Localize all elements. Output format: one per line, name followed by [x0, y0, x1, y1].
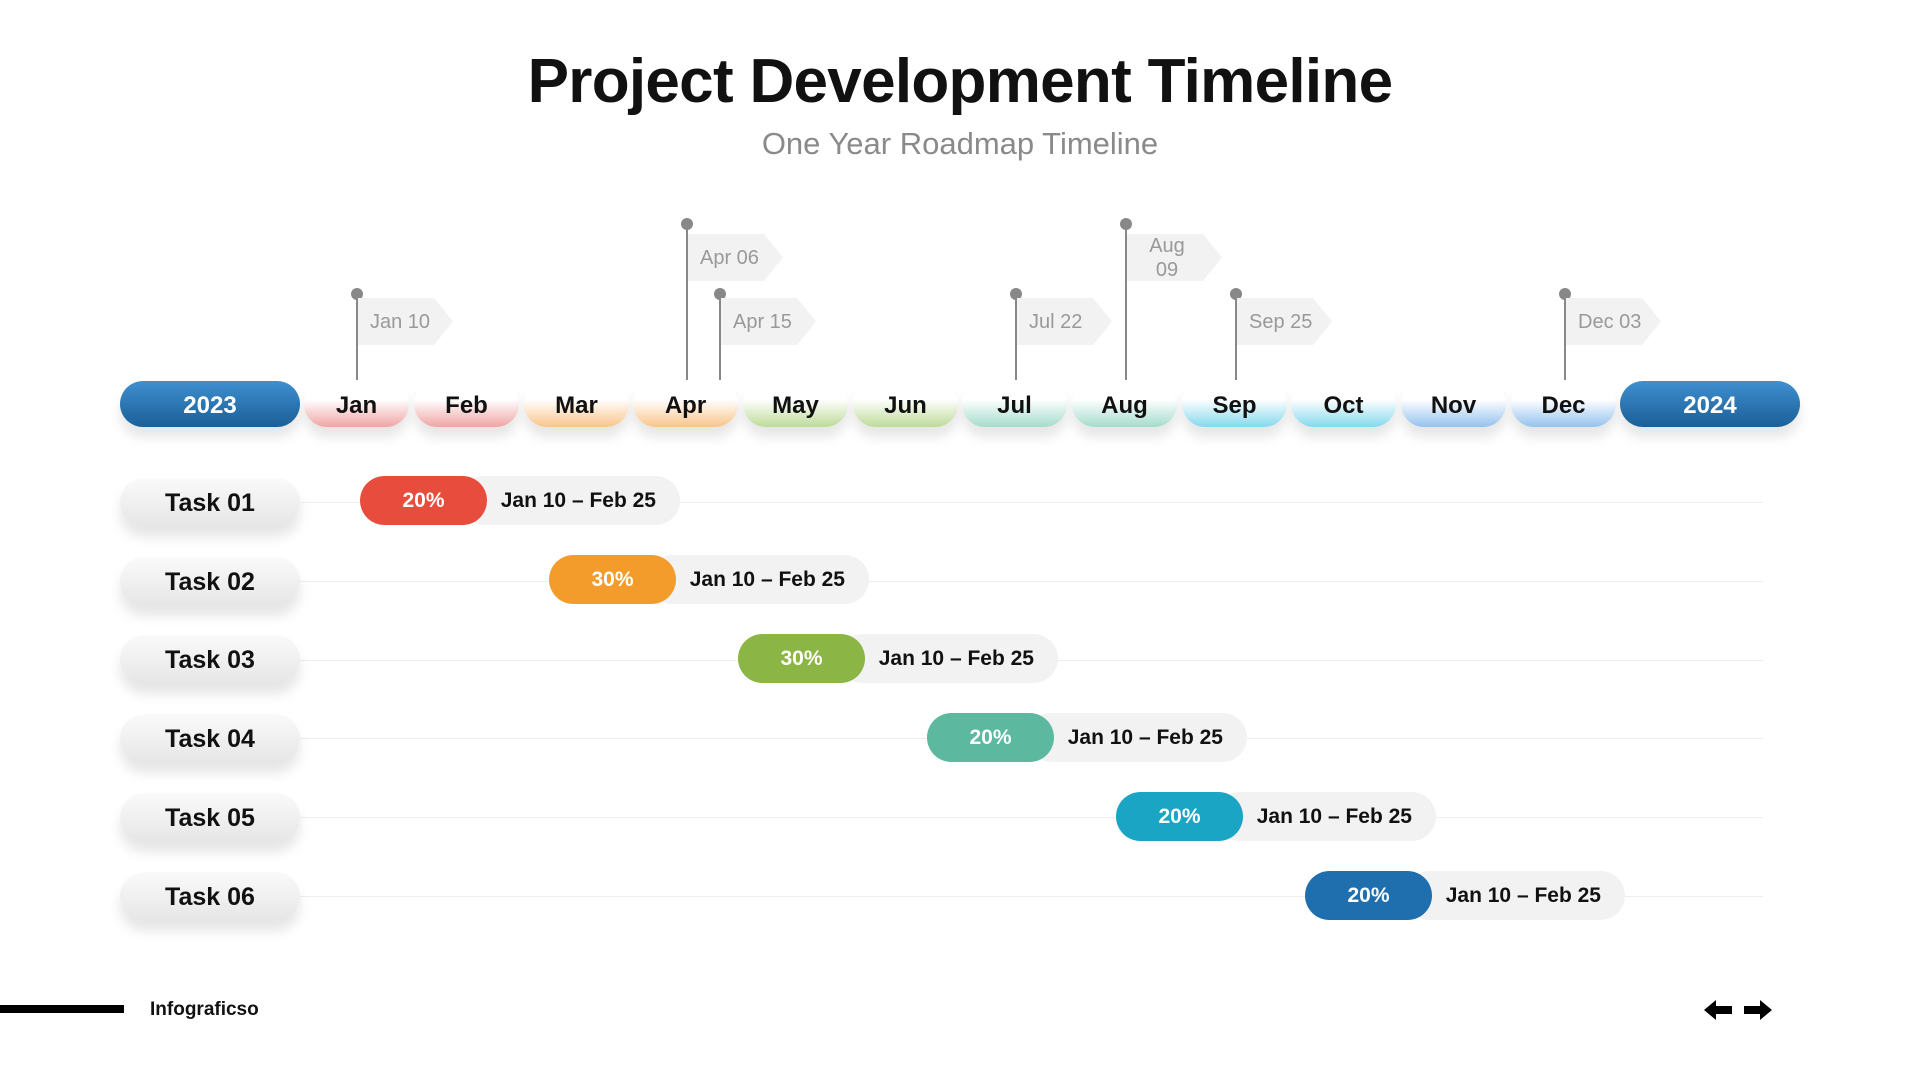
task labels: Task 01	[165, 489, 255, 517]
subtitle: One Year Roadmap Timeline	[762, 126, 1158, 161]
milestone pins: Aug	[1149, 235, 1185, 257]
task labels: Task 05	[165, 804, 255, 832]
timeline bar	[118, 381, 1802, 440]
milestone pins: 09	[1156, 259, 1178, 281]
milestone pins: Jul 22	[1029, 311, 1082, 333]
timeline bar: Nov	[1431, 392, 1476, 419]
task labels	[118, 486, 302, 934]
footer brand: Infograficso	[150, 999, 259, 1020]
task bar 01: Jan 10 – Feb 25	[501, 489, 656, 512]
timeline bar: Jun	[884, 392, 927, 419]
timeline bar: Apr	[665, 392, 706, 419]
year 2024	[1620, 381, 1800, 427]
milestone pins: Dec 03	[1578, 311, 1641, 333]
task bar 05: 20%	[1158, 805, 1201, 828]
task bar 02: Jan 10 – Feb 25	[690, 568, 845, 591]
task bar 03: 30%	[780, 647, 823, 670]
year 2023: 2023	[183, 392, 237, 419]
task bar 06	[1305, 871, 1625, 920]
pin: Aug 09	[1125, 224, 1127, 380]
milestone pins: Apr 15	[733, 311, 792, 333]
task bar 02: 30%	[591, 568, 634, 591]
task bar 04	[927, 713, 1247, 762]
months: Jan	[336, 392, 377, 419]
title: Project Development Timeline	[528, 47, 1392, 116]
timeline bar: Mar	[555, 392, 598, 419]
milestone pins: Apr 06	[700, 247, 759, 269]
months	[304, 381, 409, 427]
timeline bar: Sep	[1212, 392, 1256, 419]
timeline bar: Jul	[997, 392, 1032, 419]
task bar 03: Jan 10 – Feb 25	[879, 647, 1034, 670]
milestone pins	[351, 218, 1660, 380]
timeline bar: May	[772, 392, 819, 419]
timeline bar: Feb	[445, 392, 488, 419]
task labels: Task 03	[165, 646, 255, 674]
task bar 06: 20%	[1347, 884, 1390, 907]
milestone pins: Jan 10	[370, 311, 430, 333]
timeline bar: Dec	[1541, 392, 1586, 419]
task bar 04: 20%	[969, 726, 1012, 749]
pin: Dec 03	[1564, 294, 1566, 380]
task bar 02	[549, 555, 869, 604]
pin: Jan 10	[356, 294, 358, 380]
pin: Jul 22	[1015, 294, 1017, 380]
task bar 05	[1116, 792, 1436, 841]
task bar 03	[738, 634, 1058, 683]
task bar 06: Jan 10 – Feb 25	[1446, 884, 1601, 907]
task labels: Task 04	[165, 725, 255, 753]
footer bar	[0, 1005, 124, 1013]
icon: nav arrows	[1704, 1000, 1772, 1020]
pin: Apr 06	[686, 224, 688, 380]
task labels: Task 06	[165, 883, 255, 911]
year 2024: 2024	[1683, 392, 1737, 419]
year 2023	[120, 381, 300, 427]
pin: Apr 15	[719, 294, 721, 380]
task bar 01: 20%	[402, 489, 445, 512]
task labels: Task 02	[165, 568, 255, 596]
task bar 04: Jan 10 – Feb 25	[1068, 726, 1223, 749]
pin: Sep 25	[1235, 294, 1237, 380]
task bar 05: Jan 10 – Feb 25	[1257, 805, 1412, 828]
task bar 01	[360, 476, 680, 525]
timeline bar: Oct	[1323, 392, 1364, 419]
timeline bar: Aug	[1101, 392, 1148, 419]
milestone pins: Sep 25	[1249, 311, 1312, 333]
